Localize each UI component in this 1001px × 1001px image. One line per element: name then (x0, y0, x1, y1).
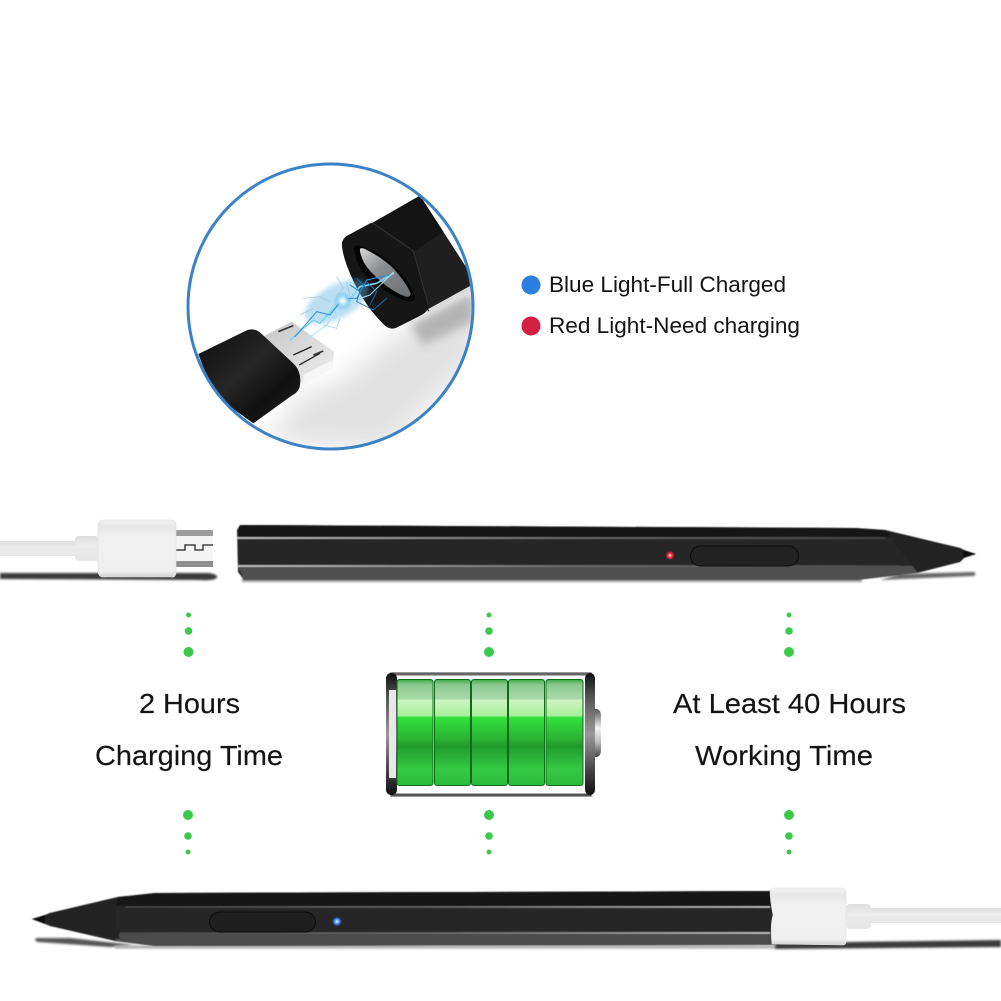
top stylus, red LED (237, 525, 976, 582)
red LED (665, 550, 675, 560)
legend: blue light: Blue Light-Full Charged (549, 272, 786, 297)
text: charging time (95, 688, 283, 771)
green dots: charging column top (184, 612, 194, 657)
green dots: battery column bottom (484, 810, 494, 854)
legend (522, 272, 800, 338)
battery terminal (592, 709, 601, 757)
circle outline (188, 164, 473, 449)
top USB cable and plug (0, 520, 217, 580)
bottom stylus, blue LED (32, 891, 775, 948)
text: charging time: Charging Time (95, 740, 283, 771)
electric spark (290, 271, 393, 342)
text: charging time: 2 Hours (139, 688, 240, 719)
green dots: charging column bottom (183, 810, 193, 854)
text: working time (673, 688, 906, 771)
side button (210, 912, 316, 932)
text: working time: Working Time (695, 740, 873, 771)
battery cells (397, 680, 583, 786)
micro USB plug (198, 322, 334, 423)
bottom USB cable and plug (770, 888, 1001, 949)
green dots: battery column top (484, 612, 494, 657)
green dots: working column top (784, 612, 794, 657)
icon: full battery (386, 673, 601, 796)
green dots: working column bottom (784, 810, 794, 854)
blue LED (332, 916, 342, 926)
side button (690, 546, 798, 566)
panel: charging connector close-up circle (187, 163, 480, 451)
legend: red light: Red Light-Need charging (549, 313, 800, 338)
text: working time: At Least 40 Hours (673, 688, 906, 719)
stylus end with charging port (342, 196, 477, 329)
